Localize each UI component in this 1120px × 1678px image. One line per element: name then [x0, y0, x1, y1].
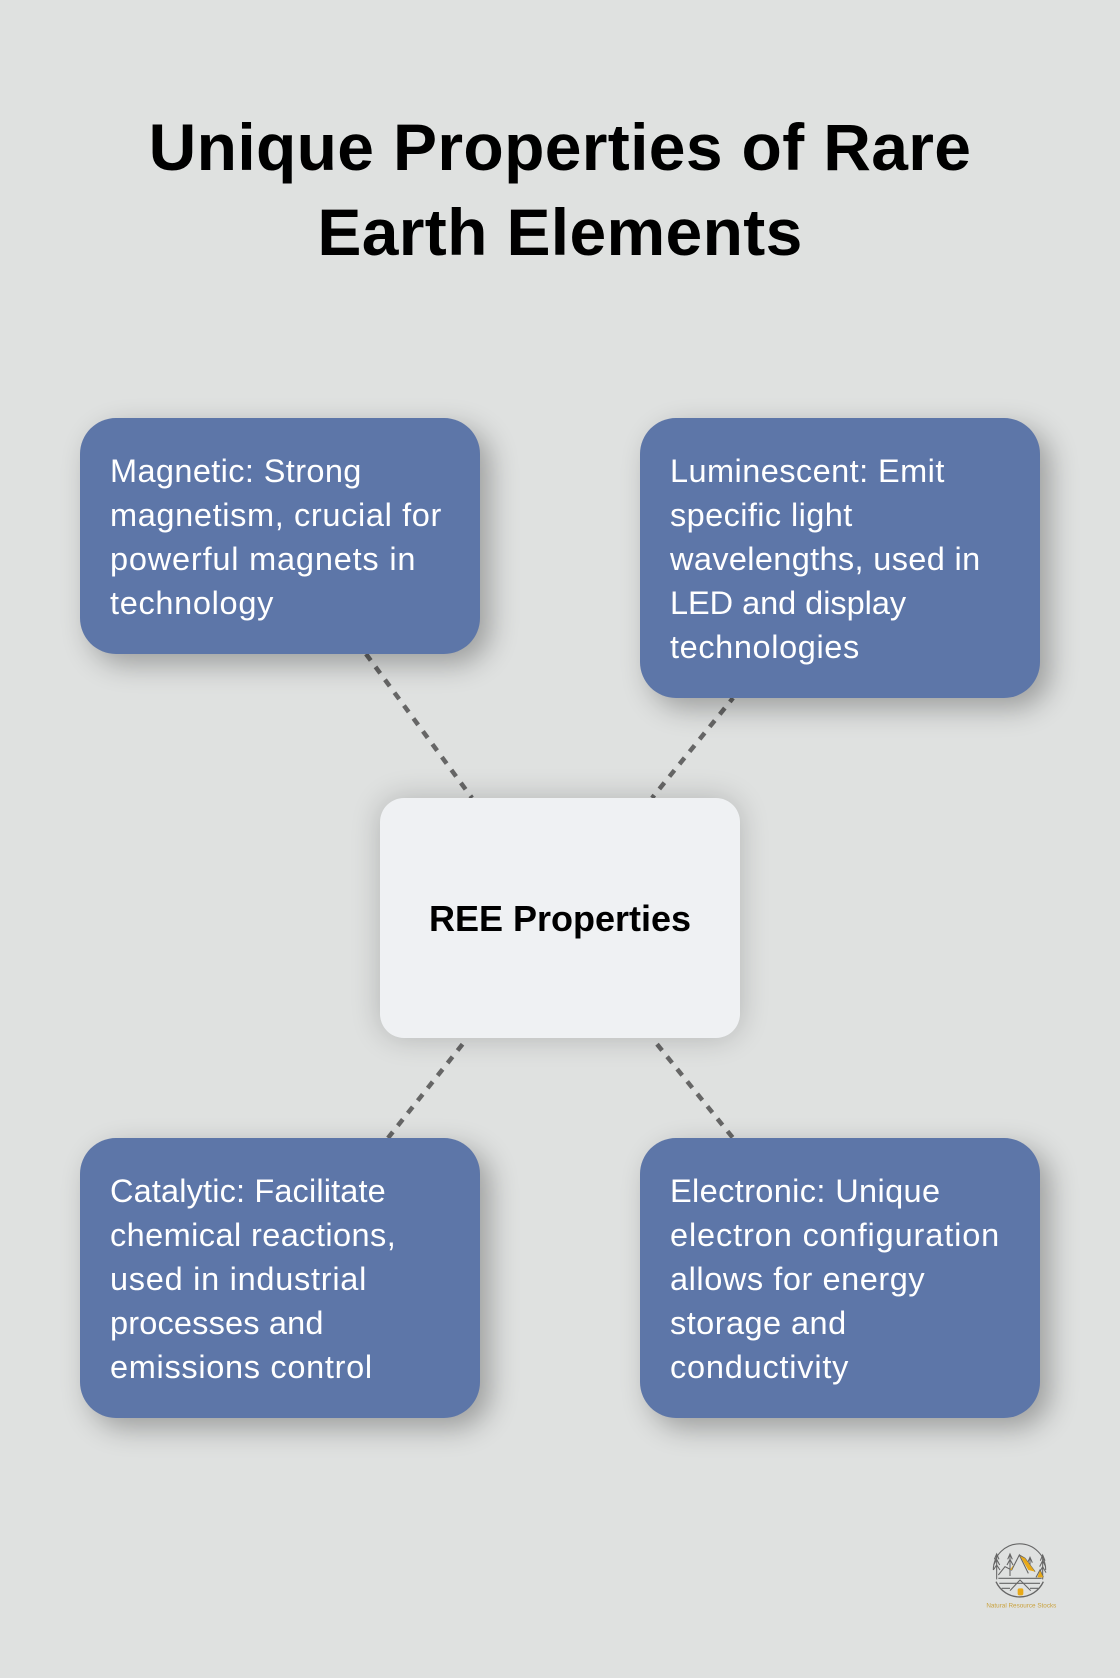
text: luminescent: Luminescent: Emit	[670, 453, 945, 489]
text: magnetic: powerful magnets in	[110, 541, 416, 577]
text: catalytic: processes and	[110, 1305, 324, 1341]
text: catalytic: used in industrial	[110, 1261, 367, 1297]
panel: electronic	[640, 1138, 1040, 1418]
text: luminescent	[670, 453, 981, 665]
panel: luminescent	[640, 418, 1040, 698]
panel: magnetic	[80, 418, 480, 654]
title: Unique Properties of Rare	[149, 110, 971, 184]
title: Earth Elements	[317, 195, 803, 269]
text: catalytic: chemical reactions,	[110, 1217, 396, 1253]
text: electronic: Electronic: Unique	[670, 1173, 940, 1209]
icon: Natural Resource Stocks logo: Natural Resource Stocks	[986, 1602, 1056, 1609]
text: catalytic	[110, 1173, 396, 1385]
text: magnetic: magnetism, crucial for	[110, 497, 442, 533]
text: REE Properties: REE Properties	[429, 898, 691, 939]
text: catalytic: emissions control	[110, 1349, 373, 1385]
text: electronic	[670, 1173, 1000, 1385]
text: luminescent: specific light	[670, 497, 853, 533]
text: electronic: conductivity	[670, 1349, 849, 1385]
title	[149, 110, 971, 269]
text: catalytic: Catalytic: Facilitate	[110, 1173, 386, 1209]
text: luminescent: technologies	[670, 629, 860, 665]
text: magnetic: Magnetic: Strong	[110, 453, 362, 489]
panel: catalytic	[80, 1138, 480, 1418]
text: electronic: electron configuration	[670, 1217, 1000, 1253]
panel: center node	[380, 798, 740, 1038]
text: magnetic	[110, 453, 442, 621]
text: electronic: storage and	[670, 1305, 847, 1341]
text: electronic: allows for energy	[670, 1261, 925, 1297]
text: luminescent: wavelengths, used in	[670, 541, 981, 577]
text: magnetic: technology	[110, 585, 274, 621]
text: luminescent: LED and display	[670, 585, 906, 621]
